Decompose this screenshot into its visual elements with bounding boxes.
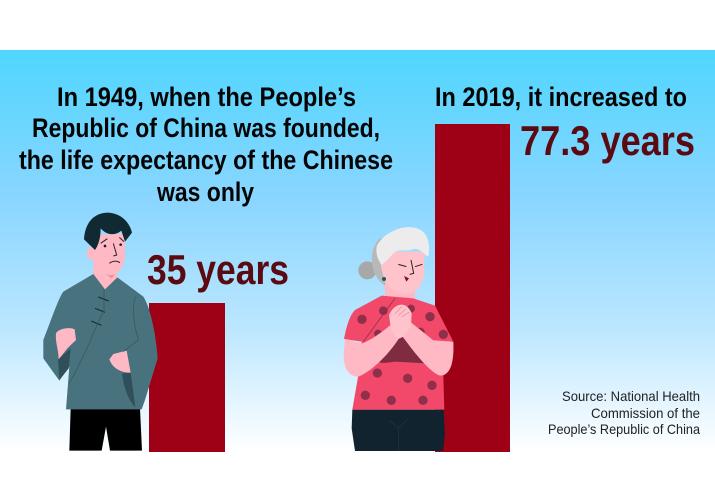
ear and neck xyxy=(87,247,117,292)
tunic xyxy=(43,274,158,409)
hair xyxy=(84,213,132,250)
face xyxy=(96,233,125,275)
earring xyxy=(382,277,386,281)
heading: 1949 xyxy=(19,82,393,207)
illustration: young man xyxy=(43,213,158,451)
sleeve shadows xyxy=(58,348,135,407)
eyes xyxy=(104,245,106,247)
source note: Source: National Health xyxy=(562,388,700,404)
source note: Commission of the xyxy=(591,405,700,421)
blouse flowers xyxy=(357,305,448,405)
neck xyxy=(385,272,415,298)
value: 35 years: 35 years xyxy=(147,246,289,293)
heading: 1949: was only xyxy=(156,177,254,207)
finger lines xyxy=(395,307,409,317)
hair xyxy=(376,227,429,265)
heading: 1949: In 1949, when the People’s xyxy=(57,82,356,112)
mouth xyxy=(404,276,409,282)
blouse xyxy=(344,296,453,410)
illustration: elderly woman xyxy=(344,227,453,451)
back hair xyxy=(372,238,398,286)
heading: 1949: Republic of China was founded, xyxy=(32,113,380,143)
trousers xyxy=(69,408,142,451)
heading: 1949: the life expectancy of the Chinese xyxy=(19,145,393,175)
arms xyxy=(344,322,453,377)
mouth and brows xyxy=(101,237,124,263)
tunic seams xyxy=(69,289,138,383)
trousers xyxy=(352,410,445,451)
source note: People’s Republic of China xyxy=(548,421,700,437)
hair bun xyxy=(358,261,376,279)
hands xyxy=(56,328,131,373)
face details xyxy=(398,260,422,274)
bar: 2019 value xyxy=(435,124,510,452)
trouser seam xyxy=(389,419,408,451)
face xyxy=(380,252,424,294)
arm shadow xyxy=(367,332,427,363)
bar: 1949 value xyxy=(149,303,225,452)
clasped hands xyxy=(389,305,412,339)
source note xyxy=(548,388,700,437)
buttons xyxy=(91,297,109,325)
blouse seam xyxy=(363,298,395,342)
collar shadow xyxy=(104,273,115,278)
